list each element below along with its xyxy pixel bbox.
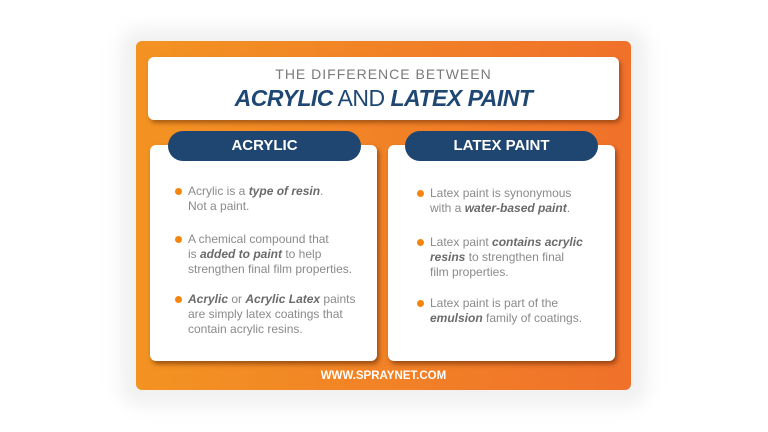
text: acrylic bullet 1 (188, 184, 323, 214)
text: latex bullet 2: resins to strengthen final (430, 250, 564, 264)
text: latex bullet 1 (430, 186, 571, 216)
panel: orange background (136, 41, 631, 390)
text: acrylic bullet 3: contain acrylic resins. (188, 322, 303, 336)
heading: latex paint: LATEX PAINT (453, 137, 550, 154)
title: ACRYLIC AND LATEX PAINT (235, 85, 532, 111)
heading: acrylic: ACRYLIC (231, 137, 298, 154)
text: latex bullet 2: film properties. (430, 265, 509, 279)
text: latex bullet 3: Latex paint is part of the (430, 296, 558, 310)
text: acrylic bullet 2: is added to paint to help (188, 247, 321, 261)
panel: latex card (388, 145, 615, 361)
text: latex bullet 3: emulsion family of coatings. (430, 311, 582, 325)
text: acrylic bullet 3 (188, 292, 355, 337)
footer url: WWW.SPRAYNET.COM (321, 370, 446, 382)
text: latex bullet 2: Latex paint contains acrylic (430, 235, 583, 249)
text: acrylic bullet 2: A chemical compound that (188, 232, 329, 246)
text: acrylic bullet 2 (188, 232, 352, 277)
text: acrylic bullet 1: Not a paint. (188, 199, 249, 213)
heading: latex paint (405, 131, 598, 161)
text: latex bullet 1: with a water-based paint. (430, 201, 570, 215)
text: acrylic bullet 3: Acrylic or Acrylic Latex paints (188, 292, 355, 306)
title: THE DIFFERENCE BETWEEN (275, 66, 492, 82)
text: acrylic bullet 1: Acrylic is a type of resin. (188, 184, 323, 198)
text: acrylic bullet 3: are simply latex coatings that (188, 307, 343, 321)
heading: acrylic (168, 131, 361, 161)
text: latex bullet 1: Latex paint is synonymous (430, 186, 571, 200)
text: latex bullet 3 (430, 296, 582, 326)
title (148, 57, 619, 120)
text: acrylic bullet 2: strengthen final film properties. (188, 262, 352, 276)
text: latex bullet 2 (430, 235, 583, 280)
panel: acrylic card (150, 145, 377, 361)
